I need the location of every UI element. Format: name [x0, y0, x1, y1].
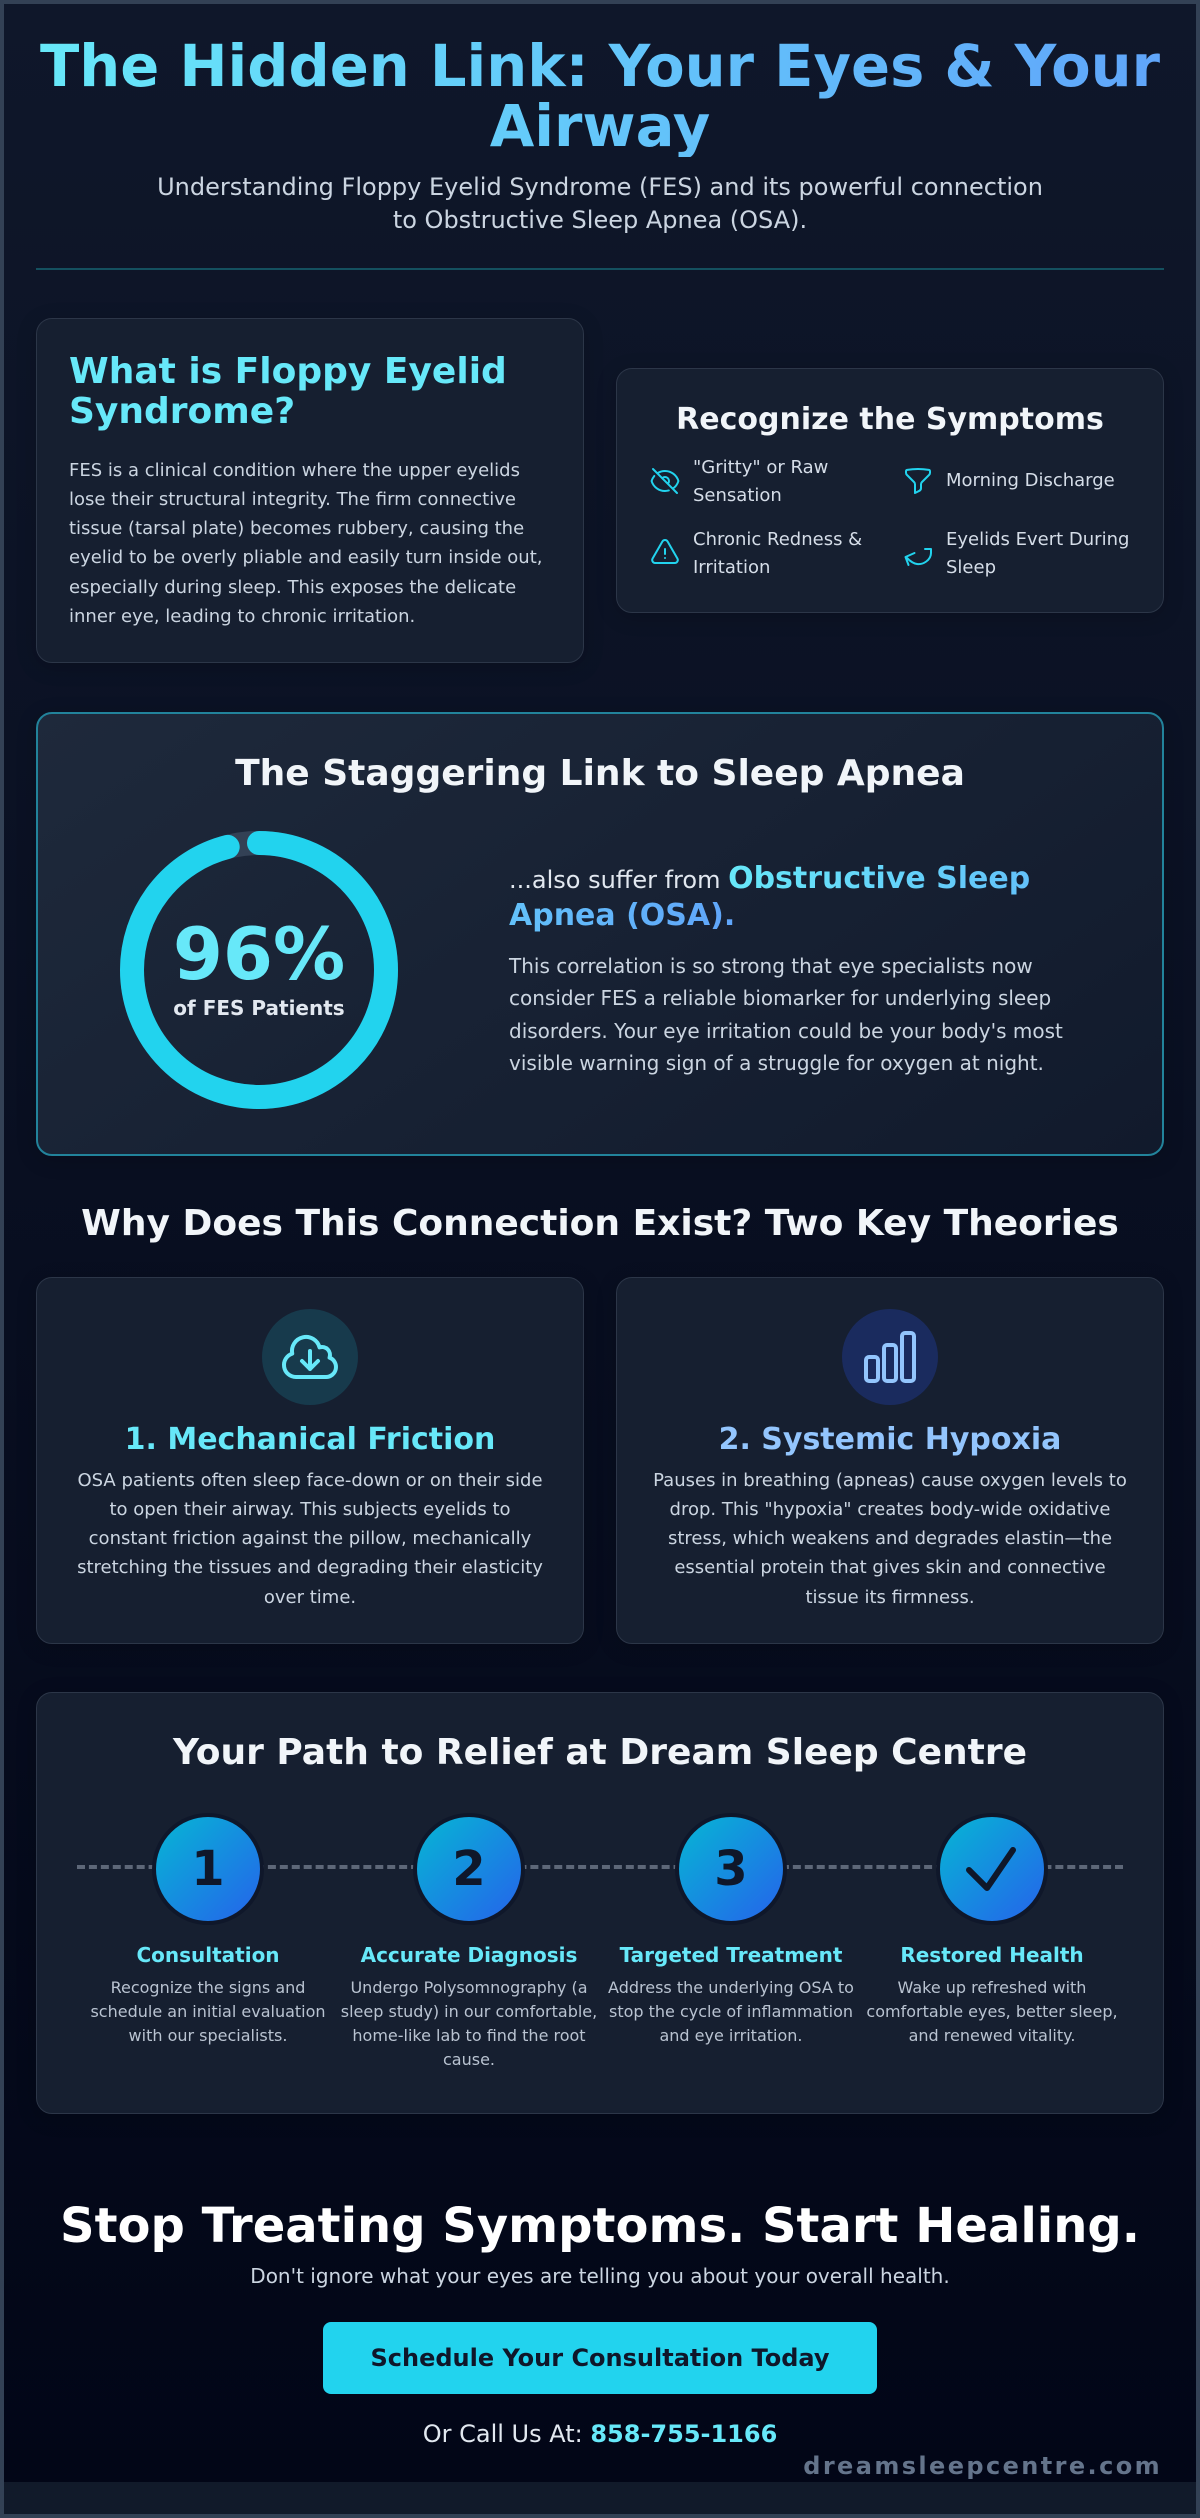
step text: cause.: [443, 2050, 495, 2069]
button: [323, 2322, 877, 2394]
text block: to open their airway. This subjects eyelids to: [109, 1499, 511, 1520]
step number: 1: [191, 1841, 225, 1897]
cta subtext: Don't ignore what your eyes are telling you about your overall health.: [250, 2264, 950, 2288]
chart: 96 percent ring: [120, 831, 398, 1109]
stat label: of FES Patients: [173, 996, 345, 1020]
ring: [120, 831, 398, 1109]
stat value: 96%: [173, 912, 345, 996]
step 2: [341, 1815, 597, 2069]
step number: [413, 1813, 525, 1925]
step text: [341, 1978, 597, 2069]
symptom: chronic redness: Chronic Redness &: [693, 528, 862, 550]
callout: ...also suffer from Obstructive Sleep: [509, 861, 1030, 896]
symptom: gritty: "Gritty" or Raw: [693, 456, 828, 478]
heading: Syndrome?: [69, 390, 295, 432]
text block: FES is a clinical condition where the upper eyelids: [69, 460, 520, 480]
callout: Apnea (OSA).: [509, 898, 735, 933]
step 4: [866, 1815, 1118, 2045]
step text: Recognize the signs and: [111, 1978, 305, 1997]
text block: OSA patients often sleep face-down or on their side: [77, 1470, 543, 1490]
heading: The Staggering Link to Sleep Apnea: [235, 753, 965, 794]
step text: Undergo Polysomnography (a: [350, 1978, 588, 1997]
icon: check mark: [966, 1847, 1016, 1891]
step text: [90, 1978, 326, 2045]
text block: over time.: [264, 1587, 356, 1608]
symptom: eyelids evert: [946, 528, 1129, 578]
text block: tissue (tarsal plate) becomes rubbery, causing the: [69, 518, 524, 539]
step title: Restored Health: [900, 1943, 1084, 1967]
heading: two key theories: Why Does This Connection Exist? Two Key Theories: [81, 1203, 1119, 1244]
symptom: eyelids evert: Sleep: [946, 557, 996, 578]
symptom: chronic redness: [693, 528, 862, 578]
timeline line: [77, 1865, 1123, 1869]
divider: [36, 268, 1164, 270]
call to action: [60, 2198, 1162, 2480]
title: The Hidden Link: Your Eyes & Your: [40, 33, 1160, 100]
heading: Recognize the Symptoms: [676, 402, 1104, 436]
step text: sleep study) in our comfortable,: [341, 2002, 597, 2021]
step 3: [608, 1815, 854, 2045]
symptom: morning discharge: Morning Discharge: [946, 470, 1115, 490]
cta heading: Stop Treating Symptoms. Start Healing.: [60, 2198, 1140, 2254]
step text: stop the cycle of inflammation: [609, 2002, 853, 2021]
step number: [152, 1813, 264, 1925]
symptom: gritty: Sensation: [693, 485, 782, 506]
symptom: gritty: [693, 456, 828, 506]
callout: [509, 861, 1030, 933]
text block: stress, which weakens and degrades elastin—the: [668, 1528, 1112, 1549]
text block: drop. This "hypoxia" creates body-wide oxidative: [670, 1499, 1110, 1520]
panel: what is floppy eyelid syndrome: [36, 318, 584, 663]
step number: [675, 1813, 787, 1925]
step title: Consultation: [136, 1943, 280, 1967]
subtitle: Understanding Floppy Eyelid Syndrome (FES) and its powerful connection: [157, 173, 1043, 201]
text block: [653, 1470, 1127, 1608]
website watermark: dreamsleepcentre.com: [803, 2452, 1162, 2480]
text block: Pauses in breathing (apneas) cause oxygen levels to: [653, 1470, 1127, 1490]
text block: disorders. Your eye irritation could be your body's most: [509, 1019, 1063, 1043]
button: Schedule Your Consultation Today: [370, 2344, 829, 2372]
header: [40, 33, 1160, 234]
phone: Or Call Us At: 858-755-1166: [423, 2420, 777, 2448]
heading: What is Floppy Eyelid: [69, 351, 507, 392]
icon: bar chart: [842, 1309, 938, 1405]
step text: and eye irritation.: [659, 2026, 802, 2045]
text block: [77, 1470, 543, 1608]
text block: consider FES a reliable biomarker for underlying sleep: [509, 986, 1051, 1010]
text block: lose their structural integrity. The firm connective: [69, 489, 516, 510]
step text: home-like lab to find the root: [352, 2026, 586, 2045]
icon: eye slash: [650, 468, 680, 494]
heading: [69, 351, 507, 432]
text block: constant friction against the pillow, mechanically: [89, 1528, 531, 1549]
step text: with our specialists.: [129, 2026, 287, 2045]
text block: [508, 954, 1063, 1075]
step text: [608, 1978, 854, 2045]
step text: and renewed vitality.: [909, 2026, 1075, 2045]
panel: systemic hypoxia: [616, 1277, 1164, 1644]
symptom: eyelids evert: Eyelids Evert During: [946, 528, 1129, 550]
step text: Address the underlying OSA to: [608, 1978, 854, 1997]
text block: essential protein that gives skin and connective: [674, 1557, 1106, 1578]
panel: recognize the symptoms: [616, 368, 1164, 613]
text block: inner eye, leading to chronic irritation.: [69, 606, 415, 627]
icon: funnel: [905, 468, 931, 494]
card title: 1. Mechanical Friction: [125, 1422, 495, 1456]
panel: path to relief: [36, 1692, 1164, 2114]
subtitle: [157, 173, 1043, 234]
text block: [69, 460, 542, 627]
step number: 3: [714, 1841, 748, 1897]
step check: [936, 1813, 1048, 1925]
text block: especially during sleep. This exposes the delicate: [69, 577, 516, 598]
step text: [866, 1978, 1118, 2045]
step text: Wake up refreshed with: [898, 1978, 1086, 1997]
title: [36, 37, 1164, 157]
heading: Your Path to Relief at Dream Sleep Centre: [173, 1732, 1027, 1773]
step title: Accurate Diagnosis: [361, 1943, 577, 1967]
step text: schedule an initial evaluation: [90, 2002, 326, 2021]
step title: Targeted Treatment: [620, 1943, 842, 1967]
icon: warning triangle: [651, 539, 679, 564]
icon: turning arrow: [904, 548, 932, 566]
text block: stretching the tissues and degrading their elasticity: [77, 1557, 543, 1578]
title: Airway: [490, 93, 710, 160]
text block: eyelid to be overly pliable and easily turn inside out,: [69, 547, 542, 568]
panel: staggering link: [36, 712, 1164, 1156]
text block: tissue its firmness.: [805, 1587, 975, 1608]
card title: 2. Systemic Hypoxia: [719, 1422, 1061, 1456]
step number: 2: [452, 1841, 486, 1897]
step text: comfortable eyes, better sleep,: [866, 2002, 1118, 2021]
panel: mechanical friction: [36, 1277, 584, 1644]
subtitle: to Obstructive Sleep Apnea (OSA).: [393, 206, 807, 234]
text block: visible warning sign of a struggle for oxygen at night.: [509, 1051, 1044, 1075]
icon: cloud arrow down: [262, 1309, 358, 1405]
symptom: chronic redness: Irritation: [693, 557, 770, 578]
step 1: [90, 1815, 326, 2045]
text block: This correlation is so strong that eye specialists now: [509, 954, 1033, 978]
